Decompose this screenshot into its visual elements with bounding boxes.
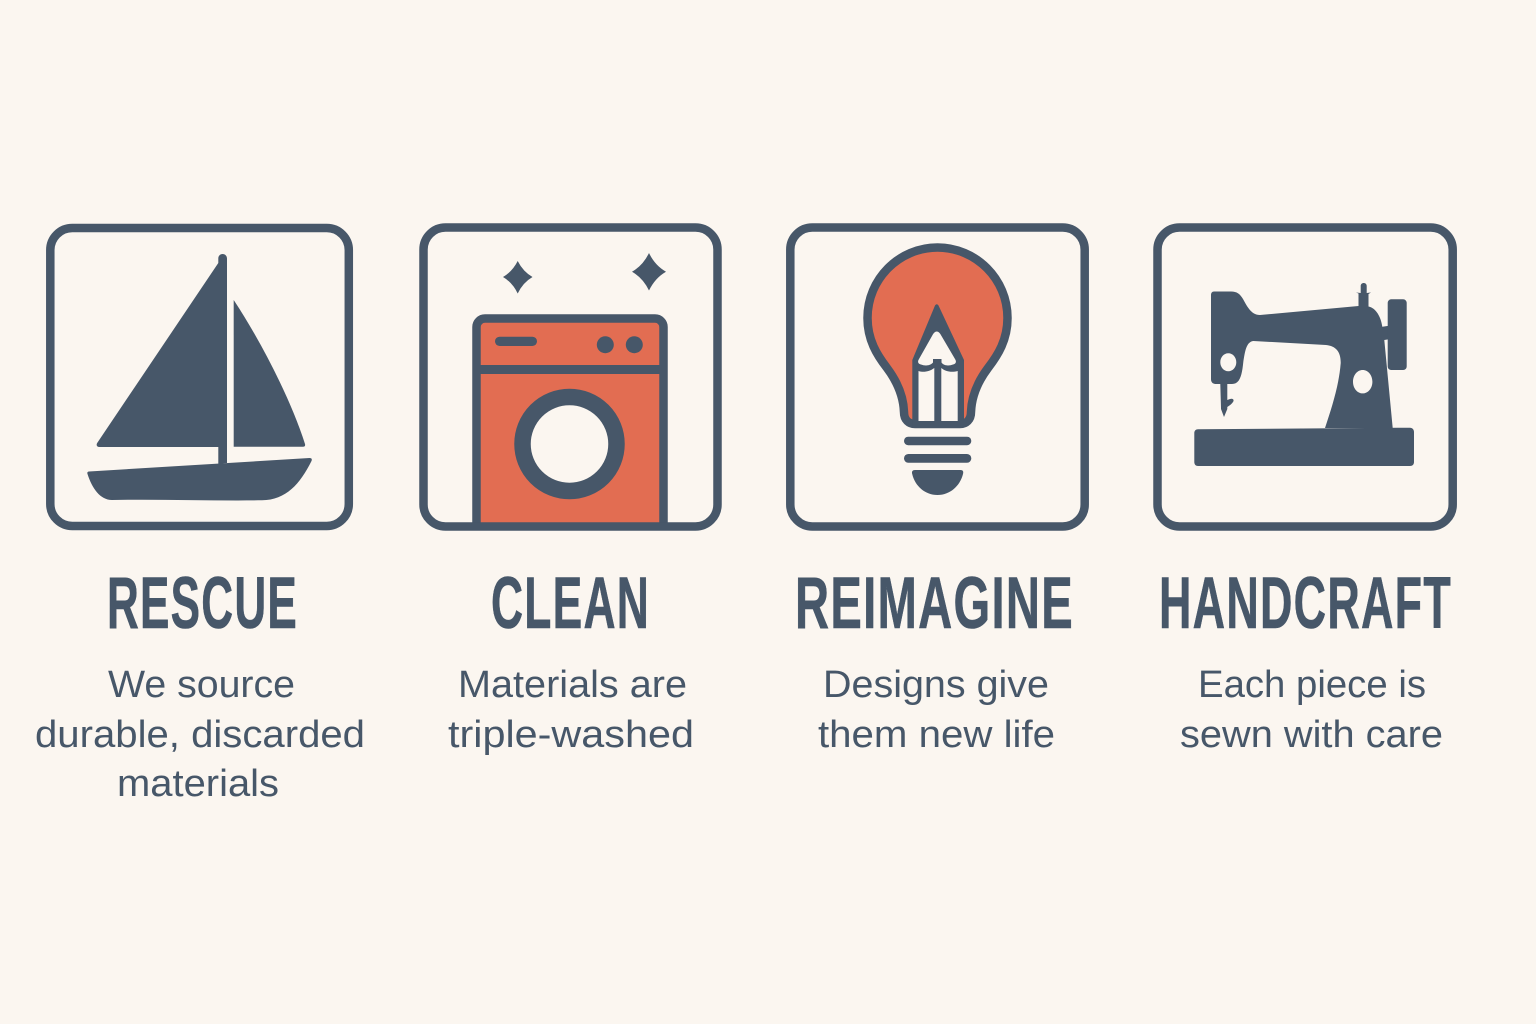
pencil <box>912 304 964 426</box>
heading: rescue: RESCUE <box>107 563 298 644</box>
panel: reimagine <box>790 228 1085 756</box>
heading: clean: CLEAN <box>491 563 650 644</box>
text: clean description: Materials are <box>458 664 687 706</box>
panel: rescue <box>35 228 365 805</box>
icon: large sparkle <box>632 253 666 290</box>
text: rescue description: materials <box>117 763 279 805</box>
text: clean description: triple-washed <box>448 714 694 756</box>
washing machine body <box>476 318 664 526</box>
text: handcraft description <box>1180 664 1443 756</box>
panel: clean <box>424 228 718 756</box>
text: reimagine description: them new life <box>818 714 1055 756</box>
text: rescue description: We source <box>108 664 295 706</box>
icon: washing machine in frame <box>424 228 718 526</box>
text: rescue description: durable, discarded <box>35 714 365 756</box>
icon: sailboat in frame <box>50 228 349 526</box>
heading: reimagine: REIMAGINE <box>795 563 1074 644</box>
text: clean description <box>448 664 694 756</box>
text: reimagine description: Designs give <box>823 664 1049 706</box>
icon: sewing machine in frame <box>1158 228 1453 526</box>
bulb glass <box>868 248 1008 424</box>
text: handcraft description: sewn with care <box>1180 714 1443 756</box>
bulb base <box>904 437 971 445</box>
text: reimagine description <box>818 664 1055 756</box>
panel: handcraft <box>1158 228 1453 756</box>
text: rescue description <box>35 664 365 805</box>
icon: small sparkle <box>503 261 532 294</box>
machine body <box>1211 283 1393 428</box>
hand wheel <box>1388 299 1407 370</box>
icon: light bulb with pencil in frame <box>790 228 1085 526</box>
machine base <box>1194 428 1414 466</box>
text: handcraft description: Each piece is <box>1198 664 1426 706</box>
